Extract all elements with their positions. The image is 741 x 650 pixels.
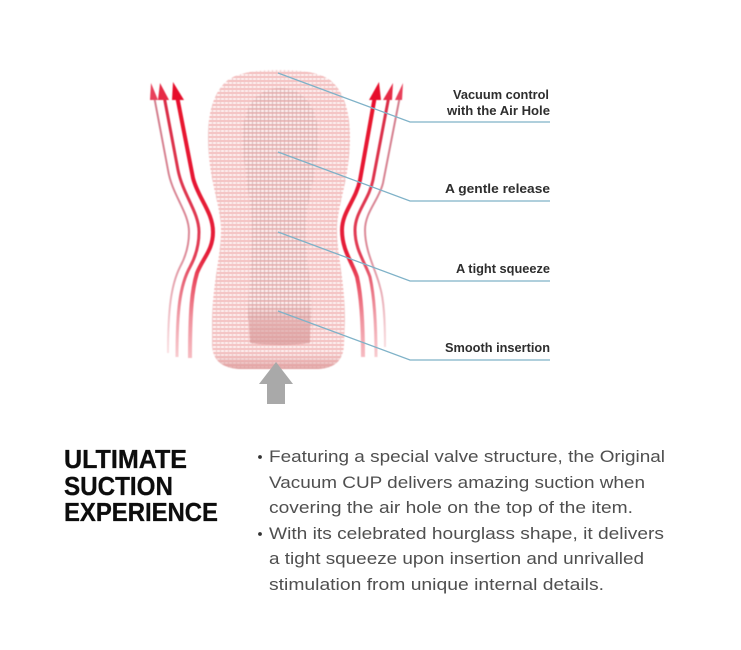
- diagram: vacuum cup cross-section: [150, 68, 550, 404]
- cup body mesh: [205, 68, 355, 372]
- bullet 2: With its celebrated hourglass shape, it delivers: [269, 524, 664, 543]
- label: vacuum control: Vacuum control: [453, 87, 549, 102]
- body text: [258, 447, 665, 594]
- airflow arrows right: [342, 82, 403, 357]
- heading: EXPERIENCE: [64, 499, 218, 527]
- leader line: smooth insertion: [278, 311, 550, 360]
- bullet 2: stimulation from unique internal details.: [269, 575, 604, 594]
- heading: SUCTION: [64, 473, 173, 501]
- leader line: tight squeeze: [278, 232, 550, 281]
- grey insertion arrow: [259, 362, 293, 404]
- label: smooth insertion: Smooth insertion: [445, 340, 550, 355]
- label: vacuum control: with the Air Hole: [446, 103, 550, 118]
- label: gentle release: A gentle release: [445, 181, 550, 196]
- leader line: gentle release: [278, 152, 550, 201]
- bullet 1: [258, 447, 665, 517]
- bullet 1: covering the air hole on the top of the item.: [269, 498, 633, 517]
- bullet 2: [258, 524, 664, 594]
- airflow arrows left: [150, 82, 213, 358]
- cup base band: [214, 354, 340, 370]
- bullet 2: a tight squeeze upon insertion and unrivalled: [269, 549, 644, 568]
- label: tight squeeze: A tight squeeze: [456, 261, 550, 276]
- heading: ULTIMATE: [64, 446, 187, 474]
- heading: [64, 446, 218, 527]
- bullet 1: Vacuum CUP delivers amazing suction when: [269, 473, 645, 492]
- arrowheads left: [150, 83, 158, 100]
- label: vacuum control: [446, 87, 550, 118]
- lower inner sleeve: [248, 306, 311, 345]
- leader line: air hole: [278, 73, 550, 122]
- bullet 1: Featuring a special valve structure, the Original: [269, 447, 665, 466]
- upper inner cavity: [243, 88, 318, 320]
- arrowheads right: [395, 83, 403, 100]
